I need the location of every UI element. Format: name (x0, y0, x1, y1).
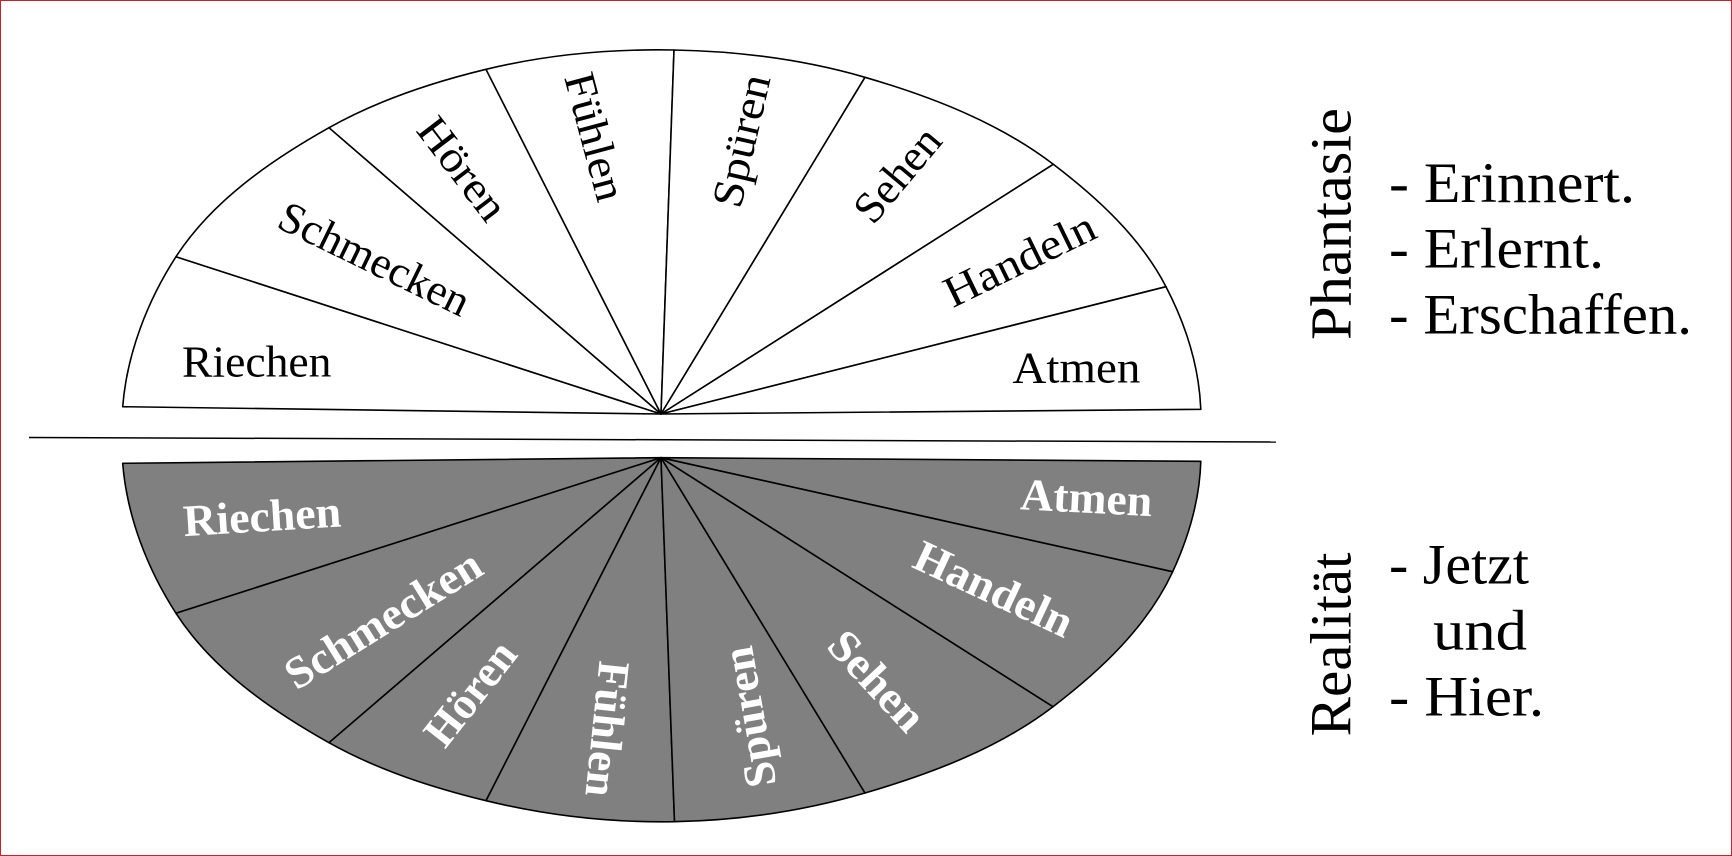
wedge: Hören (lower) (329, 458, 661, 801)
wedge: Handeln (lower): Handeln (906, 530, 1081, 647)
panel: Realität semicircle (grey) (123, 458, 1201, 822)
wedge: Handeln (lower) (661, 458, 1173, 707)
wedge: Sehen (lower) (661, 458, 1053, 793)
wedge: Sehen (lower): Sehen (818, 620, 936, 742)
text block: Phantasie list: - Erinnert. (1389, 152, 1635, 215)
wedge: Hören (lower): Hören (414, 631, 527, 756)
wedge: Riechen (upper) (123, 257, 661, 414)
wedge: Fühlen (lower): Fühlen (575, 659, 639, 799)
wedge: Handeln (upper) (661, 164, 1166, 414)
text block: Realität list (1389, 534, 1544, 728)
wedge: Hören (upper) (329, 69, 661, 414)
wedge: Atmen (upper) (661, 287, 1201, 414)
wedge: Sehen (upper): Sehen (843, 117, 952, 233)
heading: Realität: Realität (1298, 552, 1364, 736)
wedge: Spüren (lower) (661, 458, 865, 822)
wedge: Schmecken (lower) (176, 458, 661, 743)
wedge: Spüren (upper): Spüren (702, 69, 780, 212)
wedge: Riechen (lower): Riechen (182, 486, 342, 546)
wedge: Atmen (lower): Atmen (1019, 469, 1154, 526)
text block: Realität list: - Hier. (1389, 666, 1544, 728)
wedge: Fühlen (upper) (486, 50, 674, 414)
wedge: Schmecken (upper): Schmecken (271, 192, 478, 326)
wedge: Hören (upper): Hören (407, 107, 518, 230)
wedge: Schmecken (upper) (176, 128, 661, 414)
text block: Realität list: - Jetzt (1389, 534, 1529, 596)
wedge: Atmen (lower) (661, 458, 1201, 572)
text block: Phantasie list: - Erlernt. (1389, 218, 1604, 281)
panel: Phantasie semicircle (white) (123, 50, 1201, 414)
wedge: Fühlen (upper): Fühlen (554, 67, 636, 206)
divider line (29, 438, 1276, 442)
wedge: Sehen (upper) (661, 77, 1053, 414)
wedge: Spüren (lower): Spüren (712, 643, 786, 791)
wedge: Handeln (upper): Handeln (936, 202, 1104, 317)
text block: Realität list: und (1433, 600, 1527, 662)
wedge: Riechen (upper): Riechen (182, 338, 332, 387)
wedge: Fühlen (lower) (486, 458, 674, 822)
text block: Phantasie list (1389, 152, 1692, 347)
text block: Phantasie list: - Erschaffen. (1389, 284, 1692, 347)
wedge: Schmecken (lower): Schmecken (275, 539, 491, 699)
wedge: Spüren (upper) (661, 50, 865, 414)
heading: Phantasie: Phantasie (1298, 108, 1364, 340)
wedge: Riechen (lower) (123, 458, 661, 613)
wedge: Atmen (upper): Atmen (1012, 344, 1140, 393)
